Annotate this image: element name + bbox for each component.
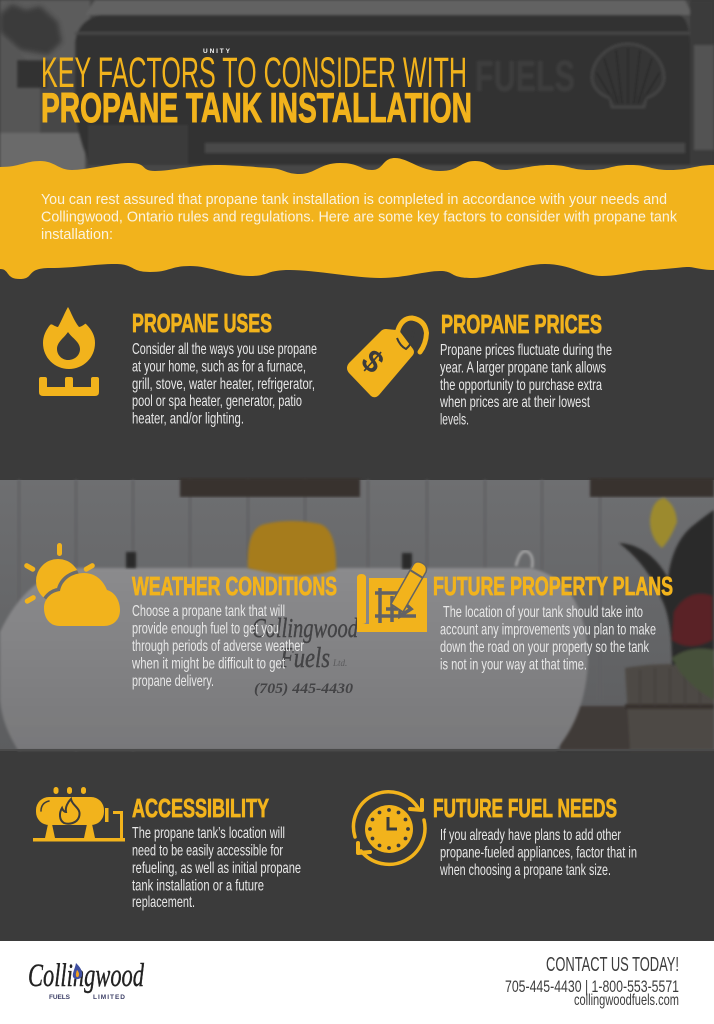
unity label: UNITY — [203, 48, 231, 55]
tank lettering: Collingwood — [252, 613, 358, 643]
tank lid — [248, 521, 336, 576]
body text: through periods of adverse weather — [132, 638, 304, 655]
body text: Propane prices fluctuate during the — [440, 342, 612, 359]
tank lettering: Ltd. — [332, 658, 347, 668]
body text: If you already have plans to add other — [440, 827, 621, 844]
body text: Choose a propane tank that will — [132, 603, 285, 620]
photo: fuel truck header: FUELS — [475, 52, 575, 101]
logo: collingwood fuels limited — [28, 958, 144, 1001]
photo: fuel truck header — [0, 0, 714, 175]
title — [41, 49, 472, 131]
body text: grill, stove, water heater, refrigerator, — [132, 376, 315, 393]
panel: propane prices — [347, 309, 612, 428]
icon: sun and cloud — [23, 543, 120, 626]
tank fittings — [126, 551, 532, 569]
body text: year. A larger propane tank allows — [440, 360, 606, 376]
body text — [132, 341, 317, 428]
heading: PROPANE USES — [132, 308, 272, 338]
intro text: Collingwood, Ontario rules and regulations. Here are some key factors to consider with propane tank — [41, 210, 678, 226]
heading: WEATHER CONDITIONS — [132, 571, 337, 601]
body text: The propane tank’s location will — [132, 825, 285, 842]
heading: PROPANE PRICES — [441, 309, 602, 339]
body text: when it might be difficult to get — [131, 656, 285, 672]
intro text: installation: — [41, 227, 113, 243]
title: PROPANE TANK INSTALLATION — [41, 84, 472, 131]
intro text — [41, 192, 678, 243]
logo: collingwood fuels limited: FUELS — [49, 994, 71, 1001]
band: yellow wavy intro — [0, 158, 714, 279]
body text: pool or spa heater, generator, patio — [132, 393, 302, 410]
body text: tank installation or a future — [132, 878, 264, 894]
body text: Consider all the ways you use propane — [132, 341, 317, 358]
body text — [439, 342, 612, 428]
panel: future property plans — [357, 562, 673, 674]
body text: when choosing a propane tank size. — [439, 862, 611, 879]
tank lettering: (705) 445-4430 — [254, 681, 354, 697]
window frames — [180, 478, 714, 497]
body text — [440, 604, 656, 674]
tank lettering — [252, 613, 358, 697]
photo: propane tank band — [0, 478, 714, 750]
tank lettering: Fuels — [279, 643, 330, 674]
body text: need to be easily accessible for — [132, 842, 283, 860]
contact text — [505, 954, 679, 1009]
body text — [131, 603, 304, 690]
heading: FUTURE FUEL NEEDS — [433, 793, 617, 823]
plant and flowers — [619, 498, 714, 700]
propane tank body — [0, 568, 588, 750]
body text: provide enough fuel to get you — [132, 620, 279, 638]
panel: weather conditions — [23, 543, 337, 690]
body text: levels. — [440, 412, 469, 428]
panel: propane uses — [39, 307, 317, 428]
body text: refueling, as well as initial propane — [132, 860, 301, 877]
body text: when prices are at their lowest — [439, 394, 590, 411]
intro text: You can rest assured that propane tank installation is completed in accordance with your needs and — [41, 192, 667, 208]
body text: propane delivery. — [132, 673, 214, 690]
body text — [439, 827, 637, 879]
body text: the opportunity to purchase extra — [440, 377, 602, 394]
icon: propane tank with flame — [33, 787, 125, 842]
body text: at your home, such as for a furnace, — [132, 358, 306, 376]
ground and barrel — [560, 664, 714, 750]
footer panel — [0, 941, 714, 1024]
body text: is not in your way at that time. — [440, 656, 587, 674]
icon: price tag — [347, 318, 426, 397]
icon: price tag: $ — [355, 343, 391, 380]
body text: heater, and/or lighting. — [132, 410, 244, 428]
panel: accessibility — [33, 787, 301, 911]
body text — [132, 825, 301, 911]
icon: clock with cycle arrows — [353, 792, 425, 864]
panel: future fuel needs — [353, 792, 637, 879]
heading: ACCESSIBILITY — [132, 793, 269, 823]
logo: collingwood fuels limited: Collingwood — [28, 958, 144, 994]
wall ribs — [19, 480, 600, 750]
photo bottom fade — [0, 749, 714, 751]
icon: flame on burner — [39, 307, 99, 396]
icon: blueprint and pencil — [357, 562, 427, 632]
logo: collingwood fuels limited: LIMITED — [93, 994, 125, 1001]
body text: replacement. — [132, 894, 195, 911]
